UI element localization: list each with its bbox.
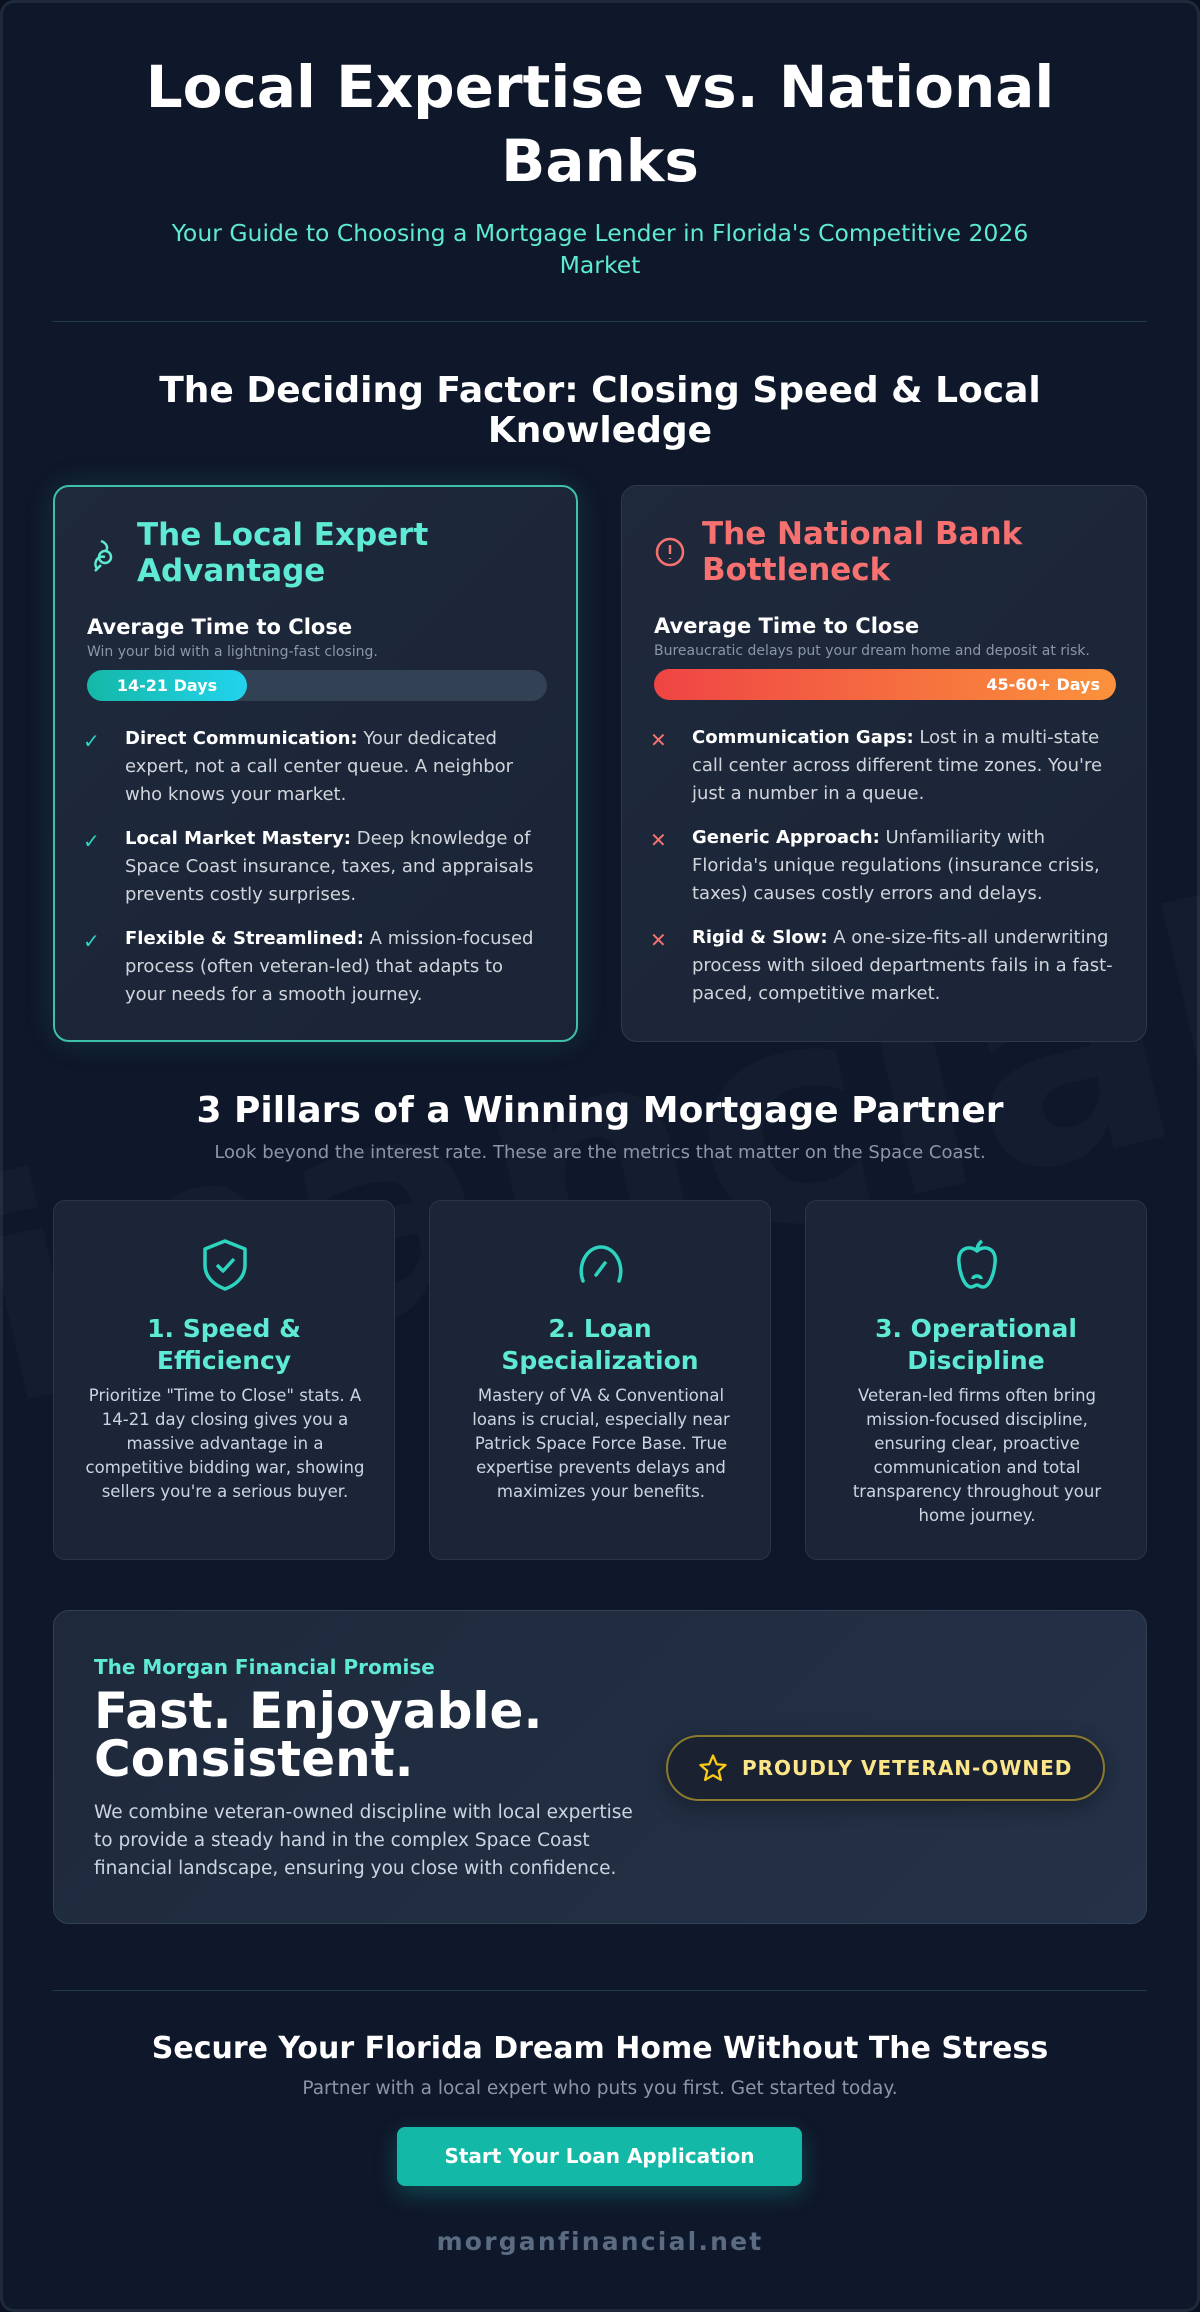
panel: local expert: [53, 485, 578, 1042]
bar: 45-60 days: 45-60+ Days: [986, 675, 1100, 694]
pillar 2: Mastery of VA & Conventional loans is crucial, especially near Patrick Space Force Base. True expertise prevents delays and maximizes your benefits.: [472, 1386, 730, 1501]
section heading: [159, 370, 1041, 451]
bar: 45-60 days: [654, 669, 1116, 700]
subtitle: Market: [560, 251, 640, 279]
badge: veteran-owned: PROUDLY VETERAN-OWNED: [742, 1756, 1072, 1780]
icon: shield: [203, 1239, 247, 1291]
bar: 14-21 days: [87, 670, 547, 701]
card title: The National Bank: [702, 516, 1022, 552]
title: Local Expertise vs. National: [146, 53, 1054, 121]
pillar 3: Veteran-led firms often bring mission-focused discipline, ensuring clear, proactive communication and total transparency throughout your home journey.: [853, 1386, 1101, 1525]
panel: local expert: Win your bid with a lightning-fast closing.: [87, 644, 378, 660]
pillar 2: [429, 1200, 771, 1560]
item list: ✓: [83, 929, 100, 953]
panel: national bank: Average Time to Close: [654, 614, 919, 638]
icon: rocket: [94, 540, 112, 572]
pillar 2: 2. Loan: [548, 1314, 652, 1343]
card title: [137, 517, 428, 589]
pillar 1: [53, 1200, 395, 1560]
promise headline: [94, 1682, 542, 1788]
pillar 1: 1. Speed &: [147, 1314, 301, 1343]
icon: gauge: [579, 1245, 622, 1283]
item list: Rigid & Slow: A one-size-fits-all underwriting process with siloed departments fails in a fast-paced, competitive market.: [692, 927, 1113, 1004]
card title: Advantage: [137, 553, 325, 589]
subtitle: [172, 219, 1028, 279]
promise label: The Morgan Financial Promise: [94, 1655, 435, 1679]
pillar 3: Discipline: [907, 1346, 1045, 1375]
item list: Communication Gaps: Lost in a multi-state call center across different time zones. You're just a number in a queue.: [692, 727, 1102, 804]
item list: Flexible & Streamlined: A mission-focused process (often veteran-led) that adapts to your needs for a smooth journey.: [125, 928, 533, 1005]
cta subtitle: Partner with a local expert who puts you first. Get started today.: [302, 2078, 898, 2099]
pillars heading: 3 Pillars of a Winning Mortgage Partner: [196, 1090, 1004, 1131]
card title: [702, 516, 1023, 588]
icon: alert: [656, 538, 684, 566]
item list: [83, 728, 534, 1005]
item list: ✕: [650, 928, 667, 952]
section heading: Knowledge: [488, 410, 712, 451]
button: [397, 2127, 802, 2186]
section heading: The Deciding Factor: Closing Speed & Local: [159, 370, 1041, 411]
subtitle: Your Guide to Choosing a Mortgage Lender in Florida's Competitive 2026: [172, 219, 1028, 247]
item list: Direct Communication: Your dedicated expert, not a call center queue. A neighbor who knows your market.: [125, 728, 513, 805]
pillars subtitle: Look beyond the interest rate. These are the metrics that matter on the Space Coast.: [214, 1142, 986, 1163]
item list: Local Market Mastery: Deep knowledge of Space Coast insurance, taxes, and appraisals prevents costly surprises.: [125, 828, 534, 905]
title: [146, 53, 1054, 195]
pillar 2: Specialization: [501, 1346, 699, 1375]
promise headline: Consistent.: [94, 1730, 414, 1788]
panel: local expert: Average Time to Close: [87, 615, 352, 639]
item list: [650, 727, 1113, 1004]
panel: national bank: [621, 485, 1147, 1042]
item list: ✕: [650, 728, 667, 752]
item list: ✓: [83, 729, 100, 753]
card title: Bottleneck: [702, 552, 890, 588]
promise headline: Fast. Enjoyable.: [94, 1682, 542, 1740]
title: Banks: [501, 127, 699, 195]
pillar 3: [805, 1200, 1147, 1560]
pillar 1: Prioritize "Time to Close" stats. A 14-21 day closing gives you a massive advantage in a competitive bidding war, showing sellers you're a serious buyer.: [86, 1386, 364, 1501]
bar: 14-21 days: 14-21 Days: [117, 676, 217, 695]
item list: Generic Approach: Unfamiliarity with Florida's unique regulations (insurance crisis, taxes) causes costly errors and delays.: [692, 827, 1100, 904]
pillar 1: Efficiency: [157, 1346, 291, 1375]
badge: veteran-owned: [666, 1735, 1105, 1801]
promise panel: [53, 1610, 1147, 1924]
panel: national bank: Bureaucratic delays put your dream home and deposit at risk.: [654, 643, 1090, 659]
icon: apple: [957, 1240, 997, 1289]
item list: ✕: [650, 828, 667, 852]
button: Start Your Loan Application: [444, 2144, 755, 2168]
item list: ✓: [83, 829, 100, 853]
pillar 3: 3. Operational: [875, 1314, 1077, 1343]
promise body: We combine veteran-owned discipline with local expertise to provide a steady hand in the complex Space Coast financial landscape, ensuring you close with confidence.: [94, 1802, 633, 1879]
footer url: morganfinancial.net: [437, 2227, 763, 2256]
card title: The Local Expert: [137, 517, 428, 553]
cta heading: Secure Your Florida Dream Home Without The Stress: [152, 2031, 1048, 2066]
